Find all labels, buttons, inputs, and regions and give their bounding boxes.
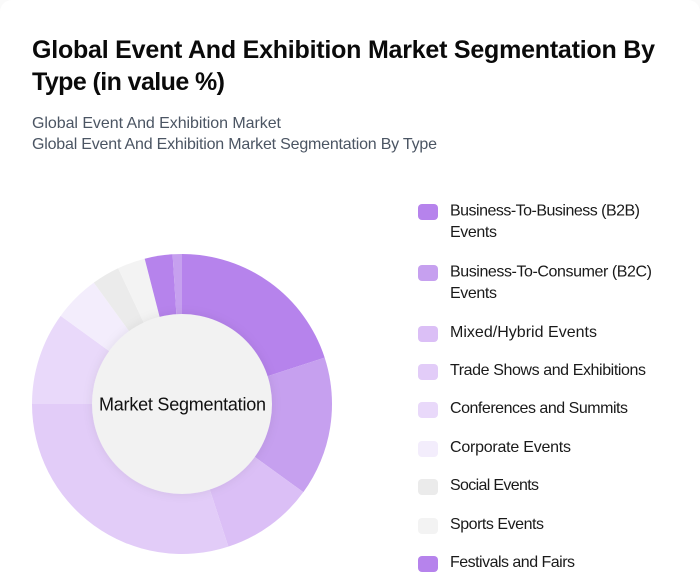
legend item: B2B: Business-To-Business (B2B) — [450, 202, 640, 220]
segment: remainder — [173, 254, 182, 404]
centre label: Market Segmentation — [99, 394, 266, 414]
donut chart — [32, 254, 332, 554]
segment: Corporate Events — [61, 283, 182, 404]
segment: Festivals and Fairs — [145, 254, 182, 404]
segment: Business-To-Business (B2B) Events — [182, 254, 325, 404]
title: Global Event And Exhibition Market Segmentation By — [32, 36, 655, 64]
legend item: B2C: Business-To-Consumer (B2C) — [450, 264, 652, 280]
subtitle — [32, 115, 437, 153]
segment: Conferences and Summits — [32, 316, 182, 404]
legend item: Social: Social Events — [450, 477, 539, 494]
legend item: Mixed/Hybrid: Mixed/Hybrid Events — [450, 324, 597, 341]
subtitle: Global Event And Exhibition Market — [32, 115, 282, 132]
donut centre — [92, 314, 272, 494]
legend item: B2B — [418, 202, 640, 241]
title — [32, 36, 655, 96]
legend item: B2C — [418, 264, 652, 302]
segment: Social Events — [94, 268, 182, 404]
subtitle: Global Event And Exhibition Market Segmentation By Type — [32, 136, 437, 153]
legend item: Festivals: Festivals and Fairs — [450, 554, 575, 571]
segment: Mixed/Hybrid Events — [182, 404, 303, 547]
segment: Trade Shows and Exhibitions — [32, 404, 228, 554]
legend item: Trade Shows: Trade Shows and Exhibitions — [450, 362, 646, 379]
legend item: Corporate: Corporate Events — [450, 439, 571, 456]
segment: Business-To-Consumer (B2C) Events — [182, 358, 332, 492]
title: Type (in value %) — [32, 68, 225, 96]
legend — [418, 202, 652, 572]
segment: Sports Events — [118, 259, 182, 404]
legend item: Sports: Sports Events — [450, 516, 544, 533]
legend item: Conferences: Conferences and Summits — [450, 400, 628, 417]
legend item: Social — [418, 477, 539, 495]
legend item: B2C: Events — [450, 285, 497, 302]
legend item: B2B: Events — [450, 224, 497, 241]
